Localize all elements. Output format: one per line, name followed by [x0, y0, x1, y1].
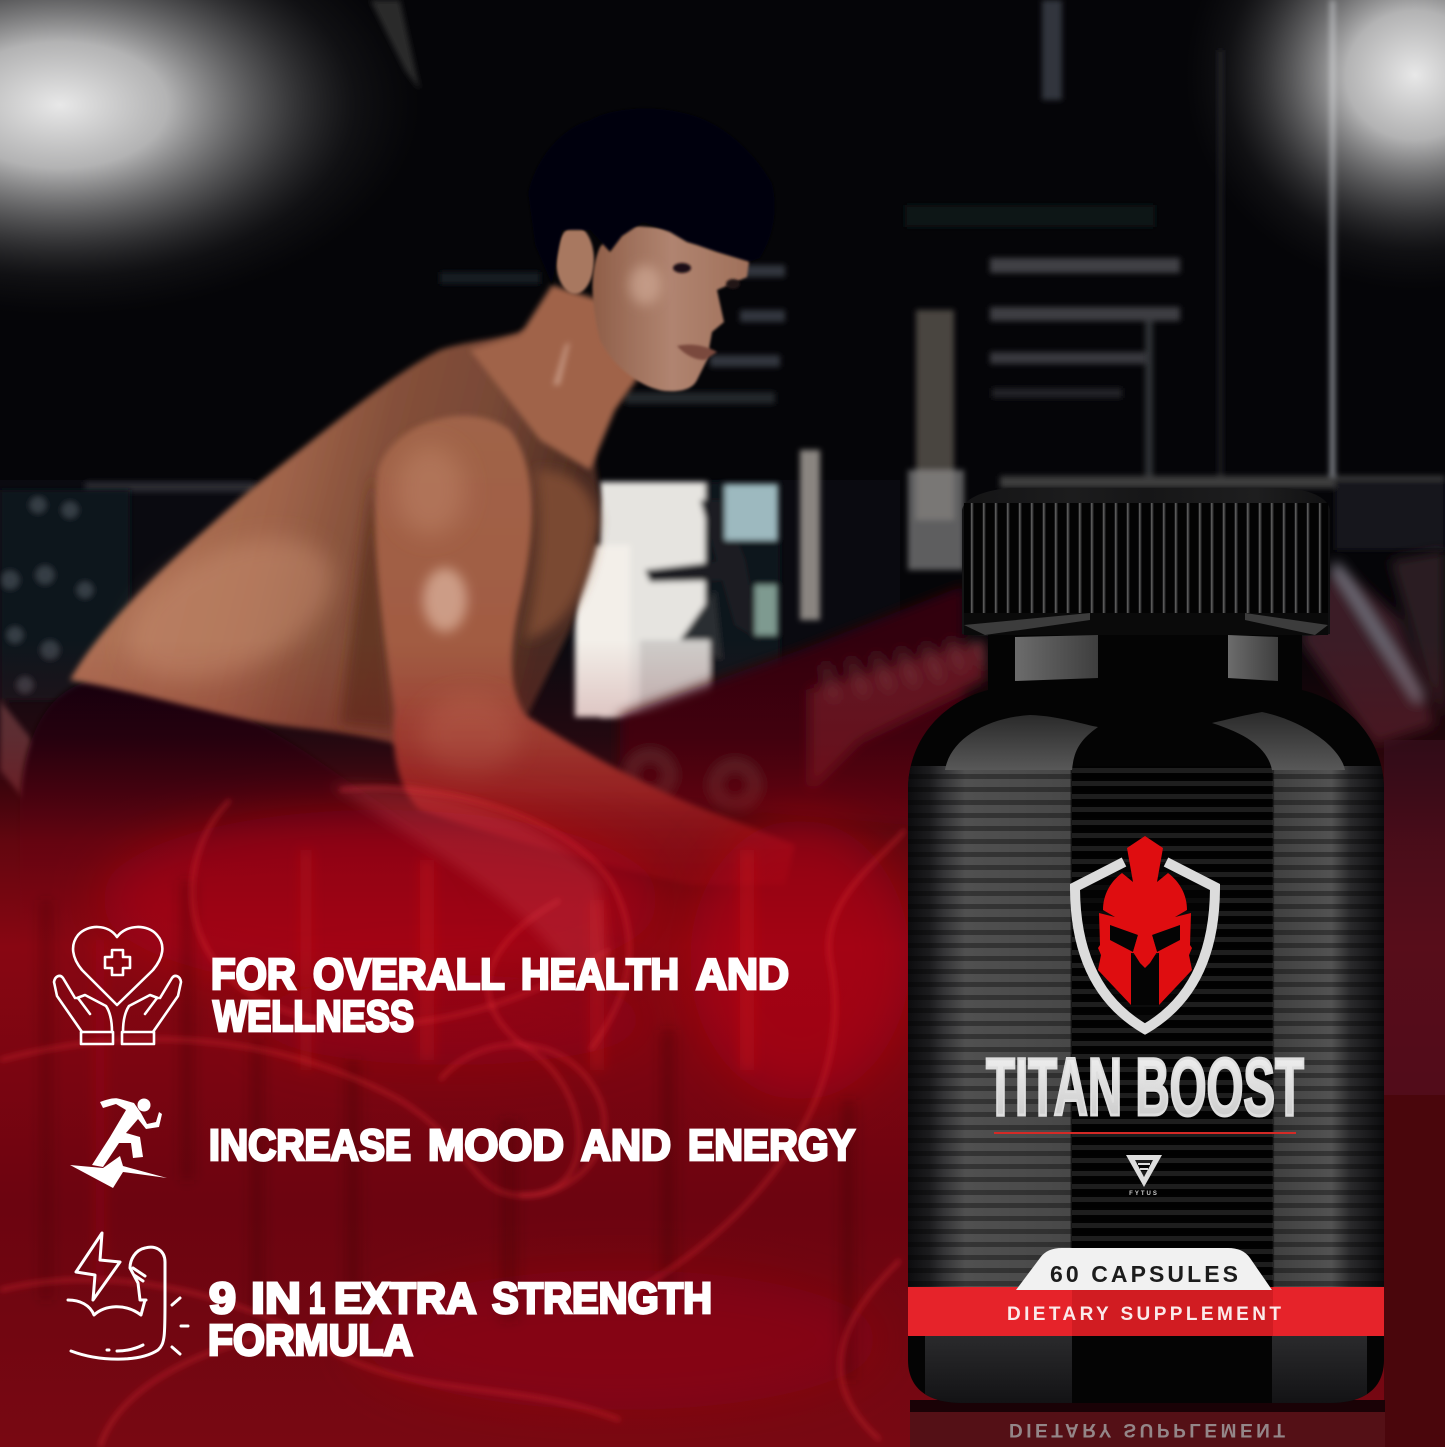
- back highlight: [105, 509, 355, 711]
- shoulder highlights: [945, 715, 1098, 770]
- red swirling overlay: [0, 640, 1445, 1447]
- brand mark: [1126, 1155, 1162, 1197]
- text: mood and energy: ENERGY: [688, 1121, 855, 1170]
- text: overall health: HEALTH: [521, 950, 679, 999]
- benefit 1: [54, 927, 801, 1044]
- right margin dark dumbbells: [1384, 740, 1445, 1095]
- text: mood and energy: MOOD: [428, 1121, 564, 1170]
- supplement label: DIETARY SUPPLEMENT: [1007, 1304, 1281, 1325]
- red band: [908, 1287, 1384, 1336]
- neck highlight: [553, 342, 570, 385]
- dumbbell rack: [620, 550, 1445, 830]
- text: overall health: WELLNESS: [213, 992, 414, 1041]
- hair: [528, 108, 775, 285]
- text: extra strength: EXTRA: [334, 1274, 476, 1323]
- icon: flexed arm with lightning: [68, 1233, 188, 1359]
- neck: [988, 635, 1302, 700]
- text: mood and energy: INCREASE: [209, 1121, 411, 1170]
- left equipment rack: [0, 490, 130, 800]
- capsule label tab: [1016, 1248, 1272, 1290]
- person: [20, 108, 795, 960]
- text: extra strength: FORMULA: [208, 1316, 413, 1365]
- right margin panel: [1384, 1095, 1445, 1447]
- shorts: [20, 678, 500, 960]
- window: [575, 482, 780, 718]
- text: extra strength: 9: [209, 1274, 236, 1323]
- benefit 3: [68, 1233, 724, 1365]
- icon: heart in hands: [54, 927, 181, 1044]
- text: overall health: AND: [696, 950, 789, 999]
- vertical streaks: [40, 850, 856, 1380]
- icon: runner: [70, 1098, 167, 1188]
- face highlight: [629, 265, 661, 305]
- torso shading: [340, 470, 395, 730]
- logo: spartan helmet in shield: [1075, 836, 1215, 1029]
- neck: [470, 285, 640, 470]
- arm highlights: [423, 568, 467, 632]
- lower gloss: [925, 1336, 1072, 1406]
- text: extra strength: 1: [309, 1274, 325, 1323]
- white lens glow: top left: [0, 0, 420, 315]
- benefit 2: [70, 1098, 855, 1188]
- stripe body: [908, 766, 1384, 1291]
- reflection: DIETARY SUPPLEMENT: [1009, 1419, 1285, 1440]
- swirl lines: [0, 788, 905, 1447]
- red rule: [994, 1132, 1296, 1134]
- eyes and mouth: [673, 263, 740, 360]
- brand mark: FYTUS: [1129, 1191, 1159, 1197]
- text: extra strength: IN: [251, 1274, 301, 1323]
- chest shading: [525, 470, 598, 640]
- ear: [556, 226, 594, 294]
- torso: [70, 330, 600, 745]
- cap: [962, 488, 1330, 638]
- bottle: [908, 488, 1385, 1447]
- text: extra strength: STRENGTH: [492, 1274, 712, 1323]
- face: [592, 225, 750, 391]
- capsule label tab: 60 CAPSULES: [1050, 1261, 1238, 1287]
- translucent wrist and bench sheen: [330, 784, 612, 990]
- white lens glow: top right: [1185, 0, 1445, 290]
- body: [908, 690, 1384, 1403]
- arm: [376, 416, 795, 885]
- text: mood and energy: AND: [581, 1121, 671, 1170]
- text: overall health: FOR: [211, 950, 296, 999]
- reflection: [910, 1400, 1385, 1447]
- text: overall health: OVERALL: [313, 950, 504, 999]
